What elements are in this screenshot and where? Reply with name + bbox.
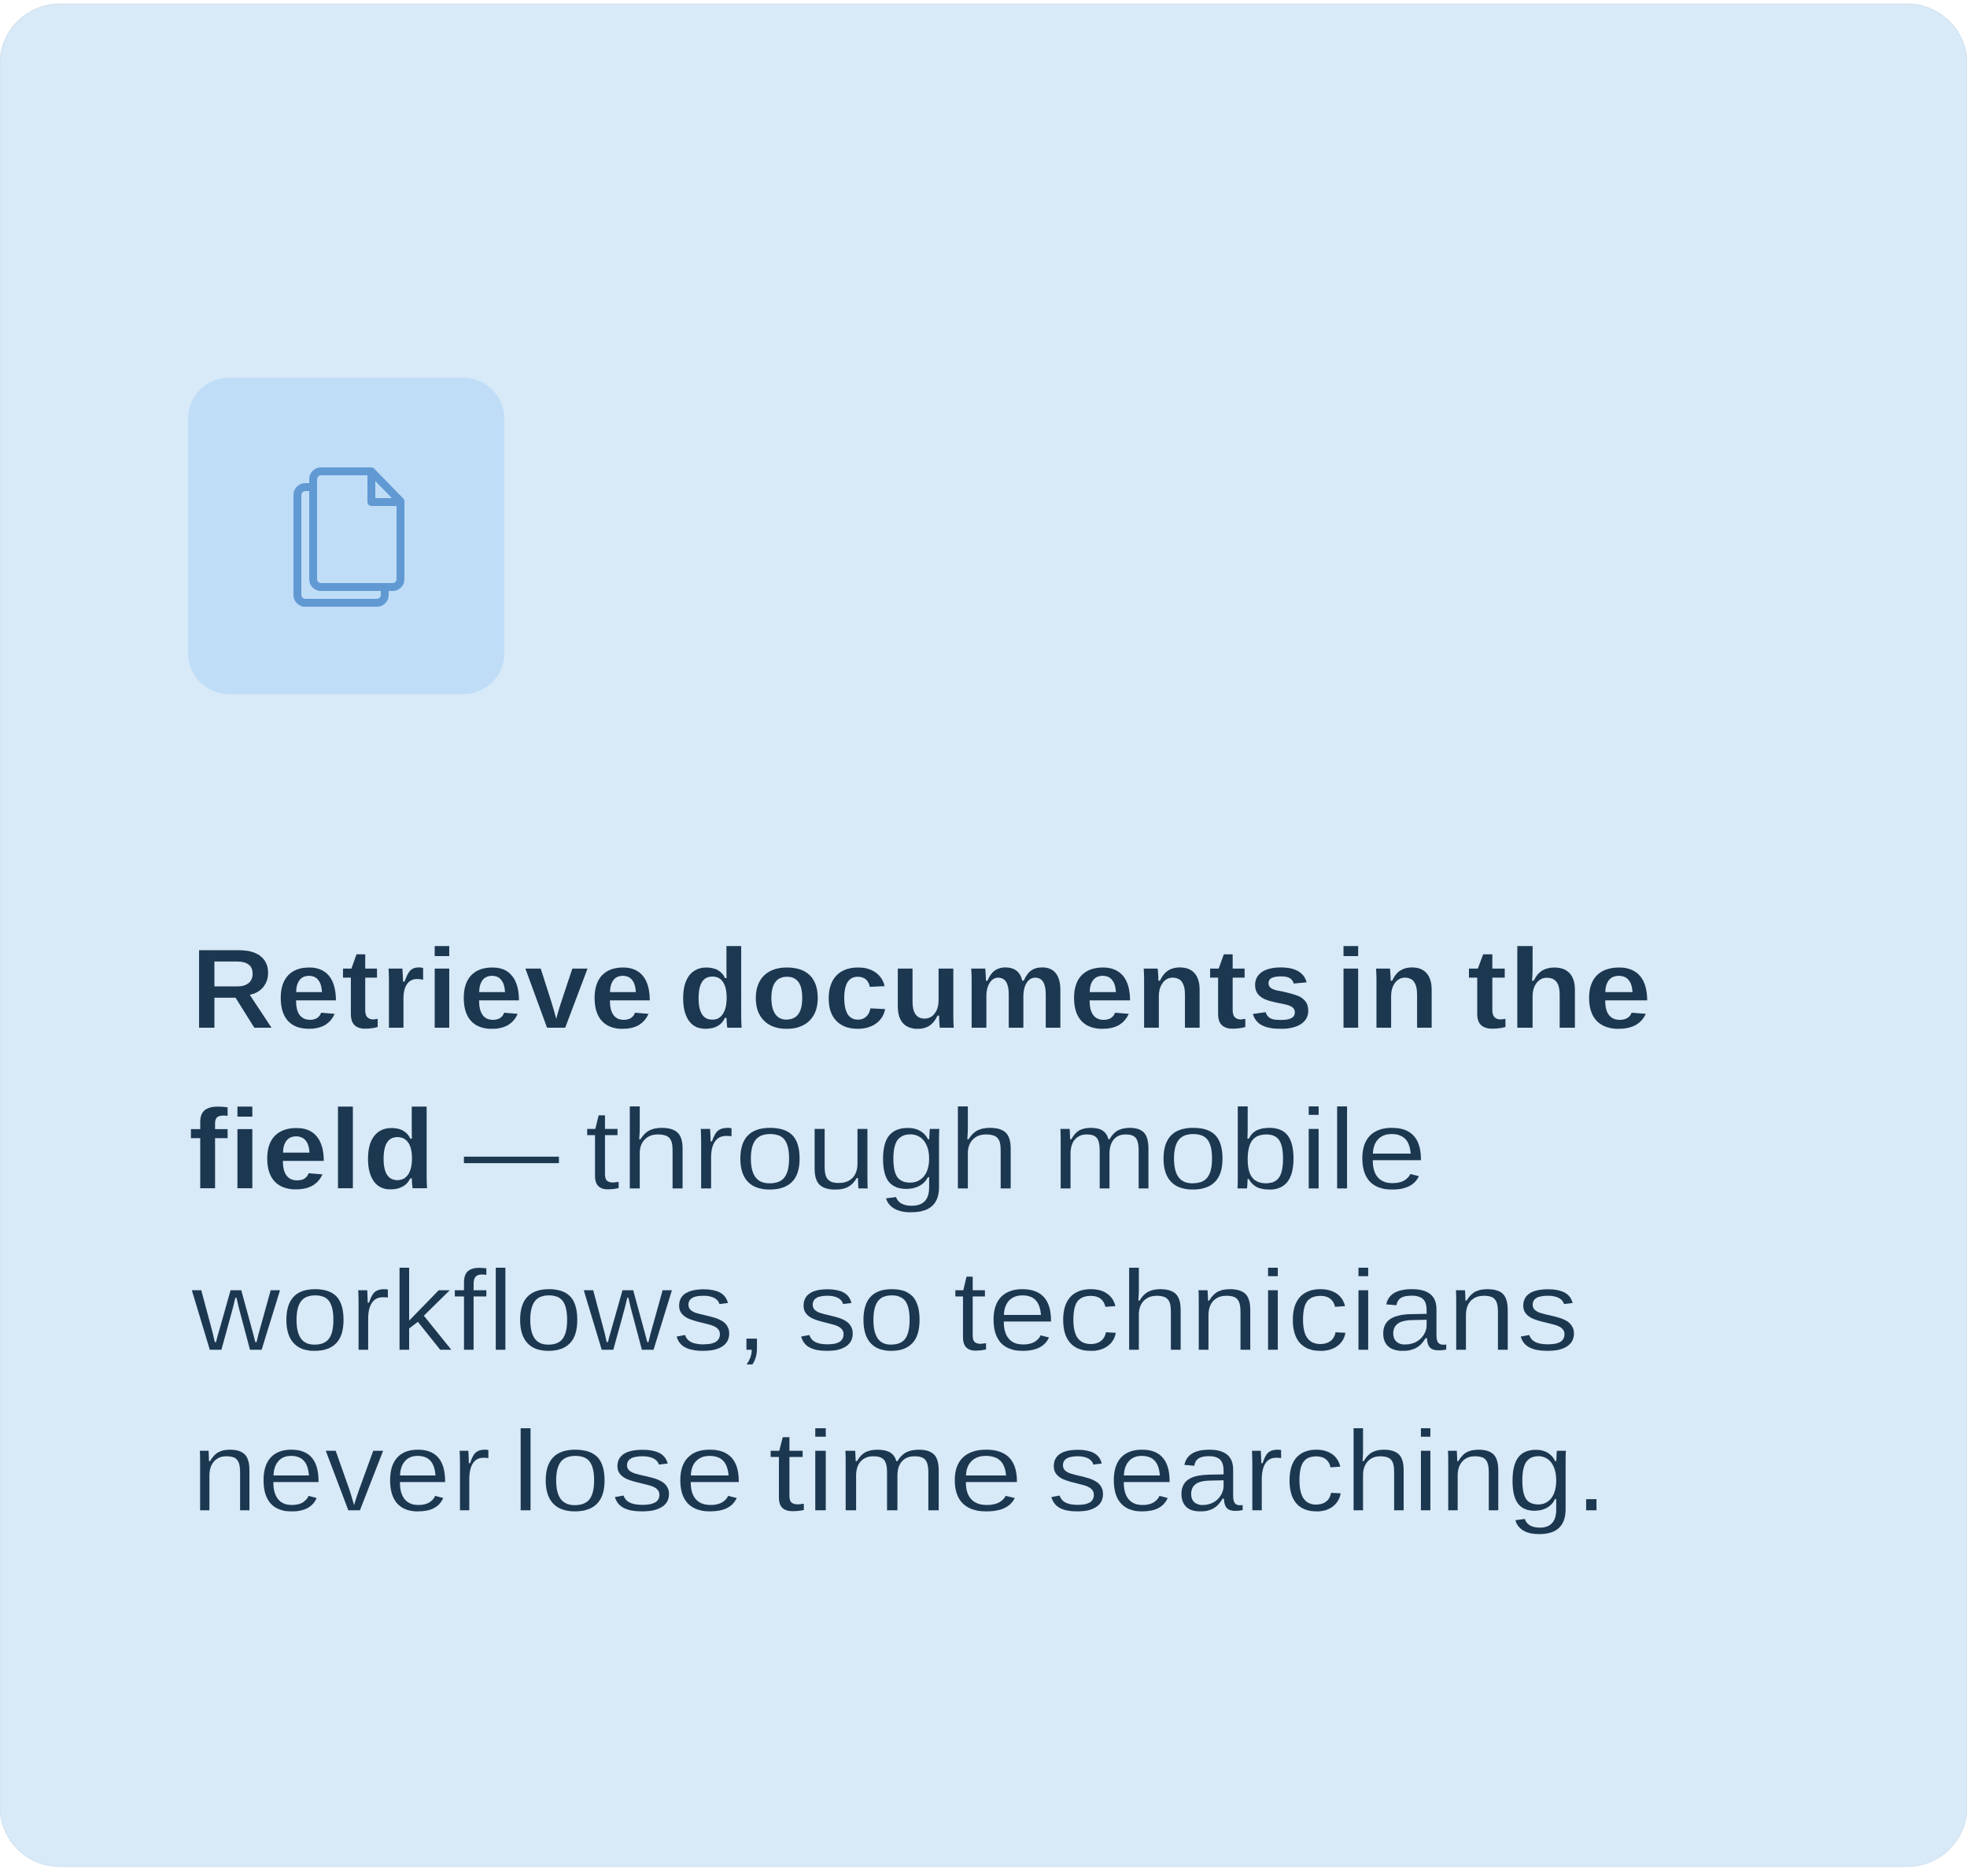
line 1 bold: the [1467,925,1652,1053]
line 2 bold and regular: mobile [1051,1085,1427,1213]
line 2 bold and regular: field [188,1085,436,1213]
line 1 bold: documents [677,925,1314,1053]
icon tile with documents icon [188,378,504,694]
line 4 regular: never [191,1407,491,1535]
line 3 regular: technicians [953,1246,1579,1375]
line 1 bold: Retrieve [190,925,655,1053]
line 4 regular: searching. [1047,1407,1608,1535]
line 4 regular [191,1407,1608,1535]
text block: main statement [188,925,1652,1535]
line 3 regular: so [797,1246,925,1375]
line 4 regular: lose [511,1407,745,1535]
icon background tile [188,378,504,694]
line 3 regular [190,1246,1579,1375]
line 4 regular: time [768,1407,1024,1535]
line 3 regular: workflows, [190,1246,769,1375]
line 2 bold and regular: — [463,1085,559,1213]
line 2 bold and regular [188,1085,1427,1213]
line 2 bold and regular: through [585,1085,1020,1213]
line 1 bold: in [1334,925,1440,1053]
icon: stacked documents [297,471,400,603]
line 1 bold [190,925,1652,1053]
